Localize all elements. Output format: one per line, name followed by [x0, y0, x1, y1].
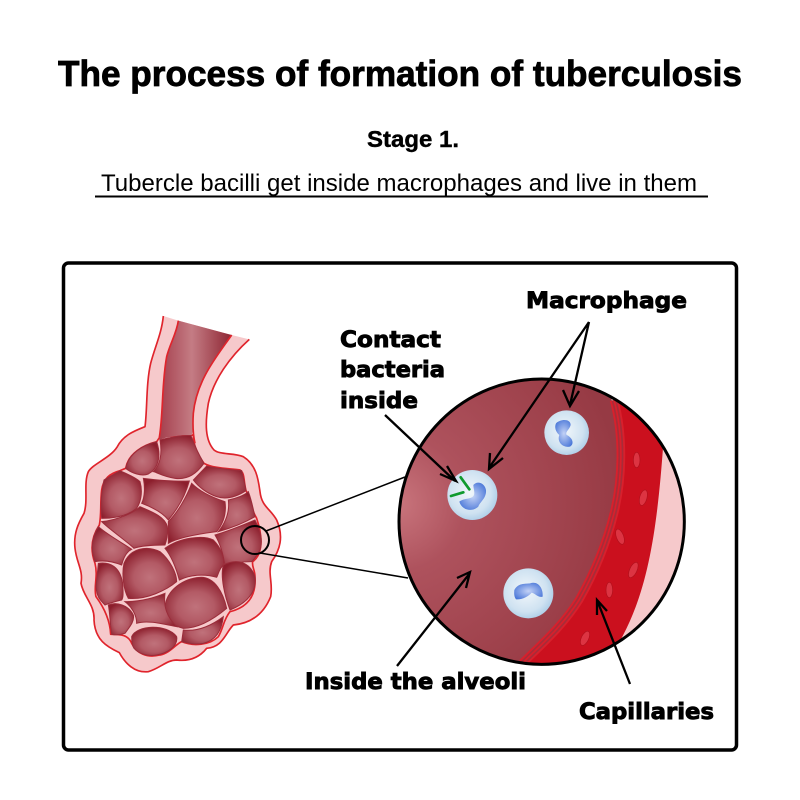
title: The process of formation of tuberculosis	[58, 53, 742, 94]
alveolar sac illustration	[75, 316, 281, 672]
alveolar cells	[92, 436, 261, 655]
stage heading: Stage 1.	[367, 126, 459, 152]
arrow: capillaries	[597, 600, 630, 684]
label: macrophage: Macrophage	[526, 289, 687, 314]
sac lumen cavity	[92, 435, 261, 656]
sac outer wall outline	[75, 316, 281, 672]
label: contact bacteria inside	[340, 328, 445, 414]
macrophage upper right	[544, 410, 589, 455]
pale tissue	[612, 399, 683, 638]
capillary	[530, 404, 663, 663]
arrows: macrophage	[489, 322, 589, 469]
label: contact bacteria inside: inside	[340, 389, 418, 414]
macrophage with bacteria	[447, 470, 497, 520]
macrophage lower	[503, 568, 553, 618]
arrow: contact bacteria	[385, 415, 456, 481]
capillary wall	[522, 400, 621, 663]
label: contact bacteria inside: bacteria	[340, 358, 445, 383]
magnifier lens on sac	[241, 526, 269, 554]
airway duct	[159, 321, 232, 440]
panel: diagram frame	[64, 263, 736, 750]
duct walls	[159, 321, 232, 443]
label: inside the alveoli: Inside the alveoli	[305, 670, 526, 695]
sac outer wall fill	[75, 316, 281, 672]
zoom connector lines	[260, 477, 408, 578]
label: contact bacteria inside: Contact	[340, 328, 442, 353]
magnified alveolus circle	[398, 378, 686, 666]
alveolus interior	[400, 380, 617, 662]
arrow: inside the alveoli	[397, 572, 470, 666]
circle outline	[399, 379, 684, 664]
subtitle with underline: Tubercle bacilli get inside macrophages and live in them	[101, 170, 697, 197]
label: capillaries: Capillaries	[579, 700, 714, 725]
red blood cells	[578, 452, 649, 647]
